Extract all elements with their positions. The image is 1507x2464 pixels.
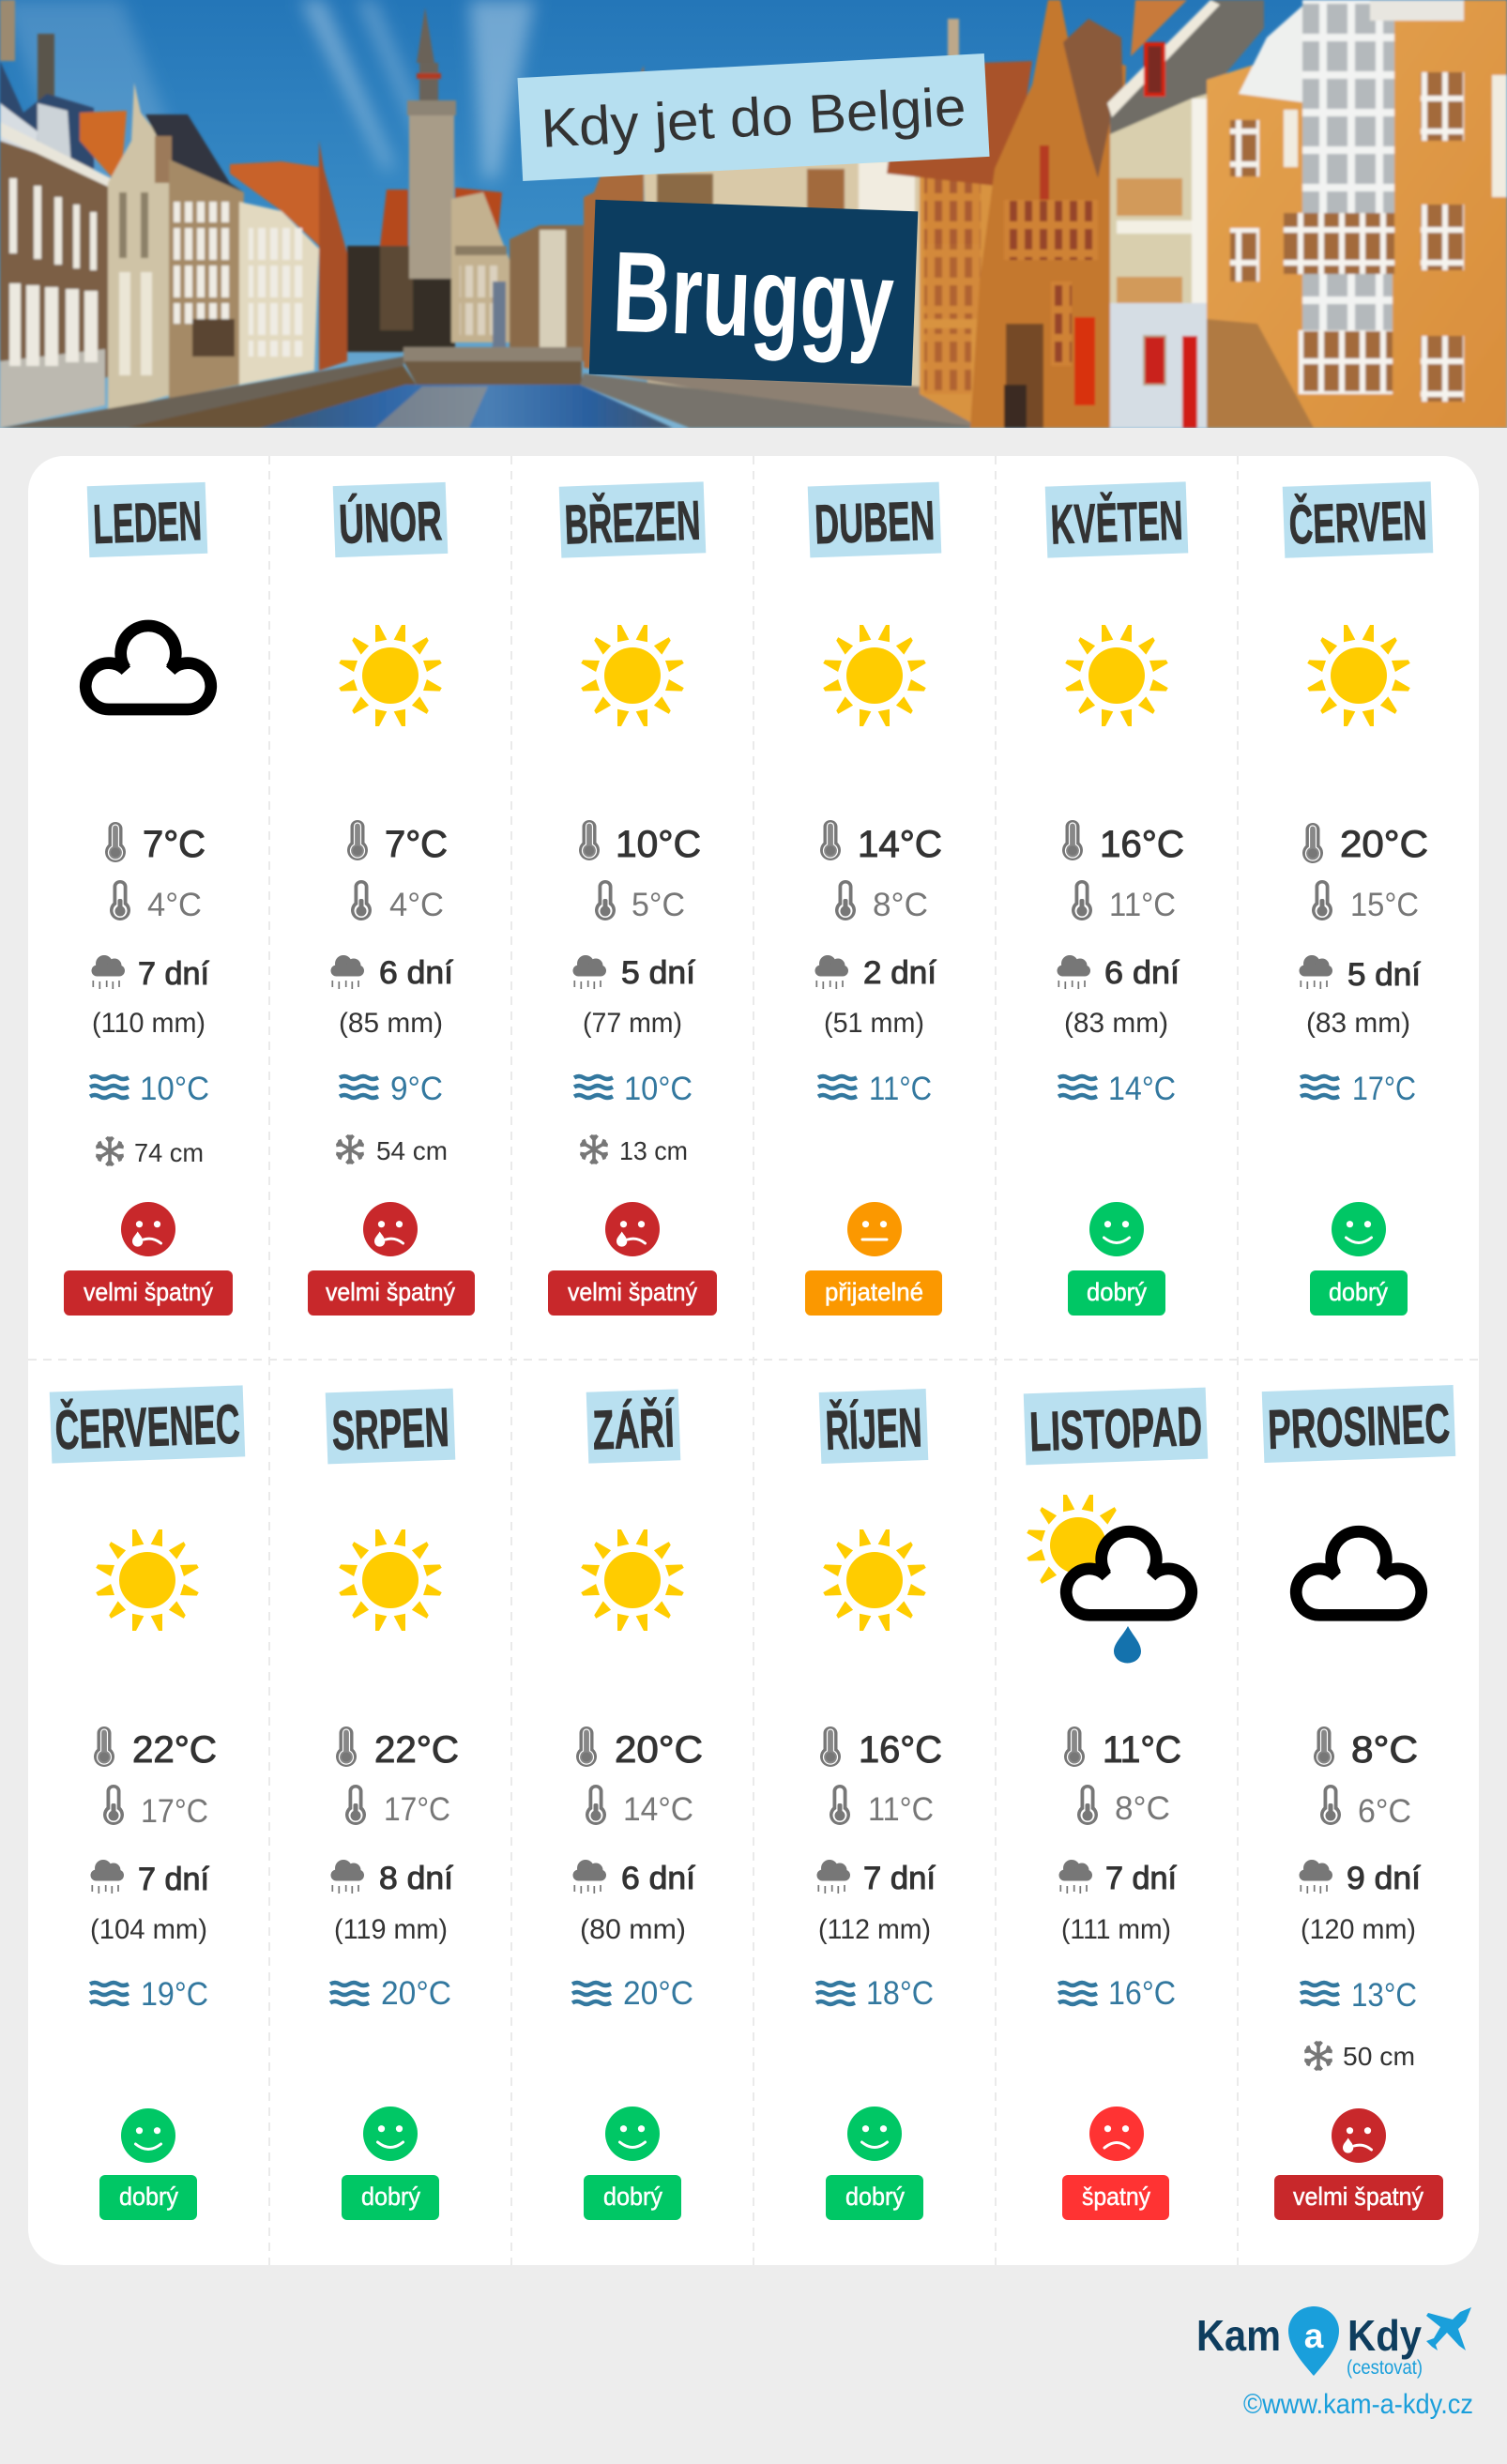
rating badge: dobrý [603, 2183, 662, 2211]
rainy days: 6 dní [621, 1861, 696, 1896]
rainy days [572, 1860, 696, 1896]
column: prosinec [1262, 1385, 1455, 2220]
sea temperature: 18°C [866, 1975, 934, 2012]
icon: sun [339, 625, 442, 726]
sea temperature: 13°C [1351, 1977, 1417, 2014]
rainy days: 8 dní [379, 1861, 454, 1896]
logo: Kam a Kdy: a [1304, 2317, 1324, 2355]
snow: 13 cm [619, 1136, 688, 1165]
high temperature [820, 1726, 942, 1771]
rating icon [1332, 2108, 1386, 2163]
rating icon [1089, 2107, 1144, 2161]
high temperature [336, 1726, 459, 1771]
logo: Kam a Kdy [1196, 2306, 1471, 2379]
title banner: Kdy jet do Belgie [517, 53, 990, 181]
rating badge [1068, 1270, 1165, 1316]
sea temperature: 14°C [1108, 1071, 1176, 1107]
precipitation: (112 mm) [818, 1914, 931, 1945]
rating badge [342, 2175, 439, 2220]
rainy days: 7 dní [863, 1861, 936, 1896]
high temperature: 8°C [1351, 1729, 1418, 1771]
low temperature: 8°C [1115, 1790, 1170, 1827]
sea temperature [1301, 1071, 1416, 1107]
month label: ÚNOR [338, 490, 443, 555]
rainy days [90, 1860, 210, 1897]
low temperature [351, 880, 444, 923]
month label: SRPEN [330, 1396, 450, 1462]
low temperature: 15°C [1350, 887, 1419, 923]
low temperature [1072, 880, 1176, 923]
rainy days [1299, 955, 1422, 993]
sea temperature [90, 1071, 209, 1107]
sea temperature [340, 1071, 443, 1107]
month label [559, 481, 706, 558]
month label: BŘEZEN [563, 488, 702, 556]
snow [96, 1137, 204, 1167]
snow [1304, 2042, 1415, 2071]
rainy days [1058, 1860, 1178, 1896]
high temperature: 16°C [859, 1729, 942, 1771]
snow: 54 cm [376, 1136, 448, 1165]
rating icon [121, 2108, 175, 2163]
high temperature [1314, 1726, 1418, 1771]
icon: sun [823, 625, 926, 726]
low temperature [103, 1785, 208, 1830]
month label [808, 482, 941, 557]
low temperature: 17°C [141, 1793, 208, 1830]
high temperature: 20°C [615, 1729, 703, 1771]
rainy days [1057, 955, 1180, 991]
high temperature [1302, 823, 1428, 865]
month label [586, 1389, 680, 1464]
high temperature: 7°C [143, 824, 206, 865]
high temperature [105, 822, 206, 865]
rainy days: 2 dní [863, 955, 937, 991]
precipitation: (104 mm) [90, 1914, 207, 1945]
precipitation: (85 mm) [339, 1008, 443, 1039]
rating badge [99, 2175, 197, 2220]
rating icon [363, 2107, 418, 2161]
column: únor [308, 482, 475, 1316]
sea temperature [1058, 1071, 1176, 1107]
low temperature [1312, 880, 1419, 923]
low temperature: 14°C [623, 1791, 693, 1828]
high temperature [576, 1726, 703, 1771]
sea temperature [90, 1976, 208, 2013]
high temperature [347, 820, 448, 865]
rainy days [1299, 1860, 1422, 1896]
rating badge [584, 2175, 681, 2220]
rating badge [826, 2175, 923, 2220]
precipitation: (111 mm) [1061, 1914, 1171, 1945]
rating icon [1332, 1202, 1386, 1256]
rating badge: velmi špatný [568, 1278, 697, 1306]
month label: ZÁŘÍ [591, 1395, 677, 1461]
icon: sun [96, 1529, 199, 1631]
logo: Kam a Kdy: Kam [1196, 2311, 1281, 2360]
rainy days [814, 955, 937, 991]
low temperature: 11°C [868, 1791, 934, 1828]
rating badge: dobrý [361, 2183, 420, 2211]
rating icon [847, 2107, 902, 2161]
icon: sun [339, 1529, 442, 1631]
column: říjen [816, 1389, 942, 2220]
sea temperature [572, 1975, 693, 2012]
high temperature [1062, 820, 1184, 865]
rating badge [308, 1270, 475, 1316]
month label [1045, 481, 1188, 558]
snow: 50 cm [1343, 2042, 1415, 2071]
rainy days: 5 dní [621, 955, 696, 991]
sea temperature: 16°C [1108, 1975, 1176, 2012]
high temperature: 10°C [616, 824, 701, 865]
icon: cloud [1296, 1531, 1422, 1615]
column: červenec [50, 1385, 245, 2220]
snow [580, 1135, 688, 1165]
high temperature: 11°C [1103, 1729, 1181, 1771]
high temperature [1064, 1726, 1181, 1771]
icon: sun [1065, 625, 1168, 726]
month label [326, 1389, 455, 1464]
rating badge: dobrý [1329, 1278, 1388, 1306]
rainy days [330, 1860, 454, 1896]
sea temperature: 17°C [1352, 1071, 1416, 1107]
rating badge [548, 1270, 717, 1316]
month label [1283, 481, 1433, 558]
rainy days: 6 dní [379, 955, 454, 991]
month label: KVĚTEN [1049, 489, 1184, 555]
column: září [572, 1389, 703, 2220]
rating badge: dobrý [1087, 1278, 1147, 1306]
rating badge [805, 1270, 942, 1316]
precipitation: (80 mm) [580, 1914, 686, 1945]
precipitation: (51 mm) [824, 1008, 924, 1039]
rating badge: dobrý [845, 2183, 905, 2211]
column: srpen [326, 1389, 459, 2220]
high temperature: 20°C [1340, 824, 1428, 865]
icon: cloud [85, 626, 211, 709]
title banner: Bruggy [589, 200, 918, 386]
title banner: Bruggy: Bruggy [611, 228, 896, 365]
low temperature [830, 1785, 934, 1828]
sea temperature: 19°C [141, 1976, 208, 2013]
precipitation: (110 mm) [92, 1008, 206, 1039]
high temperature [579, 820, 701, 865]
sea temperature: 10°C [624, 1071, 693, 1107]
header photo: Bruges canal [0, 0, 1507, 428]
low temperature: 17°C [384, 1791, 450, 1828]
icon: sun [581, 1529, 684, 1631]
rating badge: velmi špatný [1293, 2183, 1423, 2211]
rating badge [1310, 1270, 1408, 1316]
rating badge: špatný [1082, 2183, 1150, 2211]
rating badge: dobrý [119, 2183, 178, 2211]
low temperature [1320, 1785, 1411, 1830]
rating badge [64, 1270, 233, 1316]
sea temperature: 11°C [869, 1071, 932, 1107]
low temperature: 11°C [1109, 887, 1176, 923]
rainy days: 7 dní [138, 1862, 210, 1897]
rainy days: 6 dní [1104, 955, 1180, 991]
rating badge [1062, 2175, 1169, 2220]
rating icon [605, 1202, 660, 1256]
low temperature [595, 880, 685, 923]
column: listopad [1024, 1388, 1208, 2220]
rainy days: 5 dní [1347, 957, 1422, 993]
rating icon [847, 1202, 902, 1256]
precipitation: (120 mm) [1301, 1914, 1416, 1945]
sea temperature: 20°C [381, 1975, 451, 2012]
title banner: Kdy jet do Belgie: Kdy jet do Belgie [540, 76, 967, 160]
month label [50, 1385, 245, 1464]
column: březen [548, 481, 717, 1316]
high temperature: 16°C [1100, 824, 1184, 865]
rating badge: přijatelné [825, 1278, 923, 1306]
month label [1024, 1388, 1208, 1465]
rating icon [605, 2107, 660, 2161]
sea temperature: 20°C [623, 1975, 693, 2012]
column: duben [805, 482, 942, 1316]
sea temperature [574, 1071, 693, 1107]
snow: 74 cm [134, 1138, 204, 1167]
sea temperature [1301, 1977, 1417, 2014]
panel: monthly climate card [28, 456, 1479, 2265]
month label [87, 482, 207, 557]
low temperature: 5°C [632, 887, 685, 923]
rainy days [330, 955, 454, 991]
rating icon [121, 1202, 175, 1256]
month label [333, 482, 448, 557]
icon: sun [1307, 625, 1410, 726]
low temperature [586, 1785, 693, 1828]
month label: ČERVENEC [53, 1392, 241, 1461]
precipitation: (119 mm) [334, 1914, 448, 1945]
icon: sun [823, 1529, 926, 1631]
low temperature: 6°C [1358, 1793, 1411, 1830]
column: květen [1045, 481, 1188, 1316]
low temperature: 4°C [147, 887, 202, 923]
column: červen [1283, 481, 1433, 1316]
low temperature: 8°C [873, 887, 928, 923]
icon: sun [581, 625, 684, 726]
sea temperature [816, 1975, 934, 2012]
logo: Kam a Kdy: Kdy [1347, 2311, 1422, 2360]
snow [336, 1135, 448, 1165]
rating badge: velmi špatný [326, 1278, 455, 1306]
low temperature [110, 880, 202, 923]
high temperature: 14°C [858, 824, 942, 865]
high temperature [94, 1726, 217, 1771]
high temperature: 7°C [385, 824, 448, 865]
rainy days: 9 dní [1347, 1861, 1422, 1896]
rating badge [1274, 2175, 1443, 2220]
rainy days [572, 955, 696, 991]
website credit: ©www.kam-a-kdy.cz [1243, 2389, 1473, 2420]
sea temperature: 9°C [390, 1071, 443, 1107]
sea temperature: 10°C [140, 1071, 209, 1107]
low temperature [345, 1785, 450, 1828]
month label: LISTOPAD [1028, 1395, 1203, 1463]
precipitation: (77 mm) [583, 1008, 682, 1039]
month label [819, 1389, 928, 1464]
low temperature: 4°C [389, 887, 444, 923]
high temperature: 22°C [132, 1729, 217, 1771]
icon: sun behind cloud with rain drop [1027, 1495, 1192, 1663]
sea temperature [818, 1071, 932, 1107]
rating icon [363, 1202, 418, 1256]
rating badge: velmi špatný [84, 1278, 213, 1306]
month label: ŘÍJEN [824, 1395, 923, 1462]
month label: LEDEN [92, 490, 203, 555]
rainy days [92, 955, 210, 992]
rainy days [816, 1860, 936, 1896]
logo: Kam a Kdy: (cestovat) [1347, 2357, 1423, 2379]
month label: DUBEN [814, 490, 936, 555]
precipitation: (83 mm) [1306, 1008, 1410, 1039]
low temperature [835, 880, 928, 923]
sea temperature [330, 1975, 451, 2012]
precipitation: (83 mm) [1064, 1008, 1168, 1039]
rating icon [1089, 1202, 1144, 1256]
sea temperature [1058, 1975, 1176, 2012]
column: leden [64, 482, 233, 1316]
rainy days: 7 dní [1105, 1861, 1178, 1896]
high temperature: 22°C [374, 1729, 459, 1771]
low temperature [1077, 1785, 1170, 1827]
high temperature [820, 820, 942, 865]
rainy days: 7 dní [138, 956, 210, 992]
